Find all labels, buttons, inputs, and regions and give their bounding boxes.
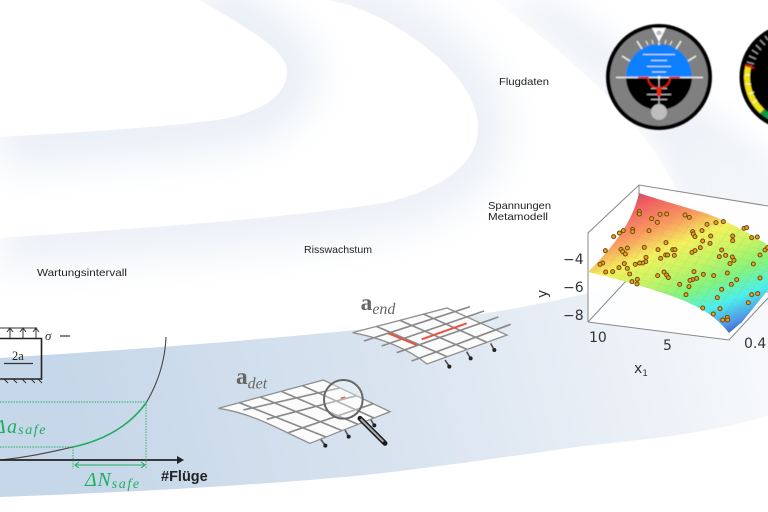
axes box	[588, 185, 768, 340]
safe segment	[73, 403, 146, 447]
label: Spannungen Metamodell: Spannungen	[488, 200, 551, 212]
stringers	[445, 343, 494, 366]
axis tick labels	[535, 252, 766, 379]
magnifier handle	[360, 418, 385, 443]
axis tick labels: −4	[563, 252, 584, 268]
plot box floor	[588, 185, 768, 340]
axis tick labels: 0.4	[744, 336, 766, 352]
magnifier lens	[324, 380, 363, 419]
label a det: det	[248, 376, 268, 393]
axis tick labels: y	[535, 290, 551, 298]
background: flowing pale swooshes	[0, 0, 768, 268]
diagram: crack growth curve: σ	[45, 328, 52, 343]
axis tick labels: 1	[642, 369, 648, 379]
axis tick labels: −6	[563, 280, 584, 296]
growth curve	[0, 337, 166, 460]
panel mesh	[218, 380, 390, 443]
label a end: end	[372, 301, 396, 318]
delta N safe: ΔN	[85, 469, 112, 491]
cracks	[388, 323, 467, 345]
label: Spannungen Metamodell: Metamodell	[488, 211, 548, 223]
specimen labels: 2a	[12, 349, 24, 363]
axis tick labels: −8	[563, 308, 584, 324]
response surface	[588, 193, 768, 333]
delta N safe: safe	[112, 477, 141, 492]
icon: airspeed gauge	[741, 25, 768, 129]
panel mesh	[353, 308, 507, 364]
axis tick labels: 10	[589, 330, 607, 346]
specimen with crack	[0, 328, 42, 383]
illustration: panel with end crack	[353, 290, 511, 369]
flights axis	[0, 459, 180, 461]
label: Flugdaten: Flugdaten	[499, 76, 549, 88]
icon: attitude indicator gauge	[608, 26, 710, 128]
safe interval guides	[0, 402, 146, 469]
surface grid	[588, 193, 768, 333]
diagram: crack growth curve	[0, 328, 208, 492]
background: blue lower band	[0, 250, 768, 497]
delta a safe: safe	[18, 423, 47, 438]
sample points	[598, 210, 768, 322]
axis tick labels: 5	[663, 338, 672, 354]
axis tick labels: x	[634, 361, 642, 377]
chart: 3D response surface metamodel	[535, 185, 768, 379]
label a det: a	[236, 364, 248, 390]
label: Wartungsintervall: Wartungsintervall	[37, 267, 127, 279]
label: Risswachstum: Risswachstum	[304, 244, 372, 256]
stringers	[320, 418, 374, 445]
illustration: panel with detectable crack and magnifier	[218, 364, 390, 448]
label a end: a	[361, 290, 372, 316]
flights label: #Flüge	[161, 469, 208, 485]
